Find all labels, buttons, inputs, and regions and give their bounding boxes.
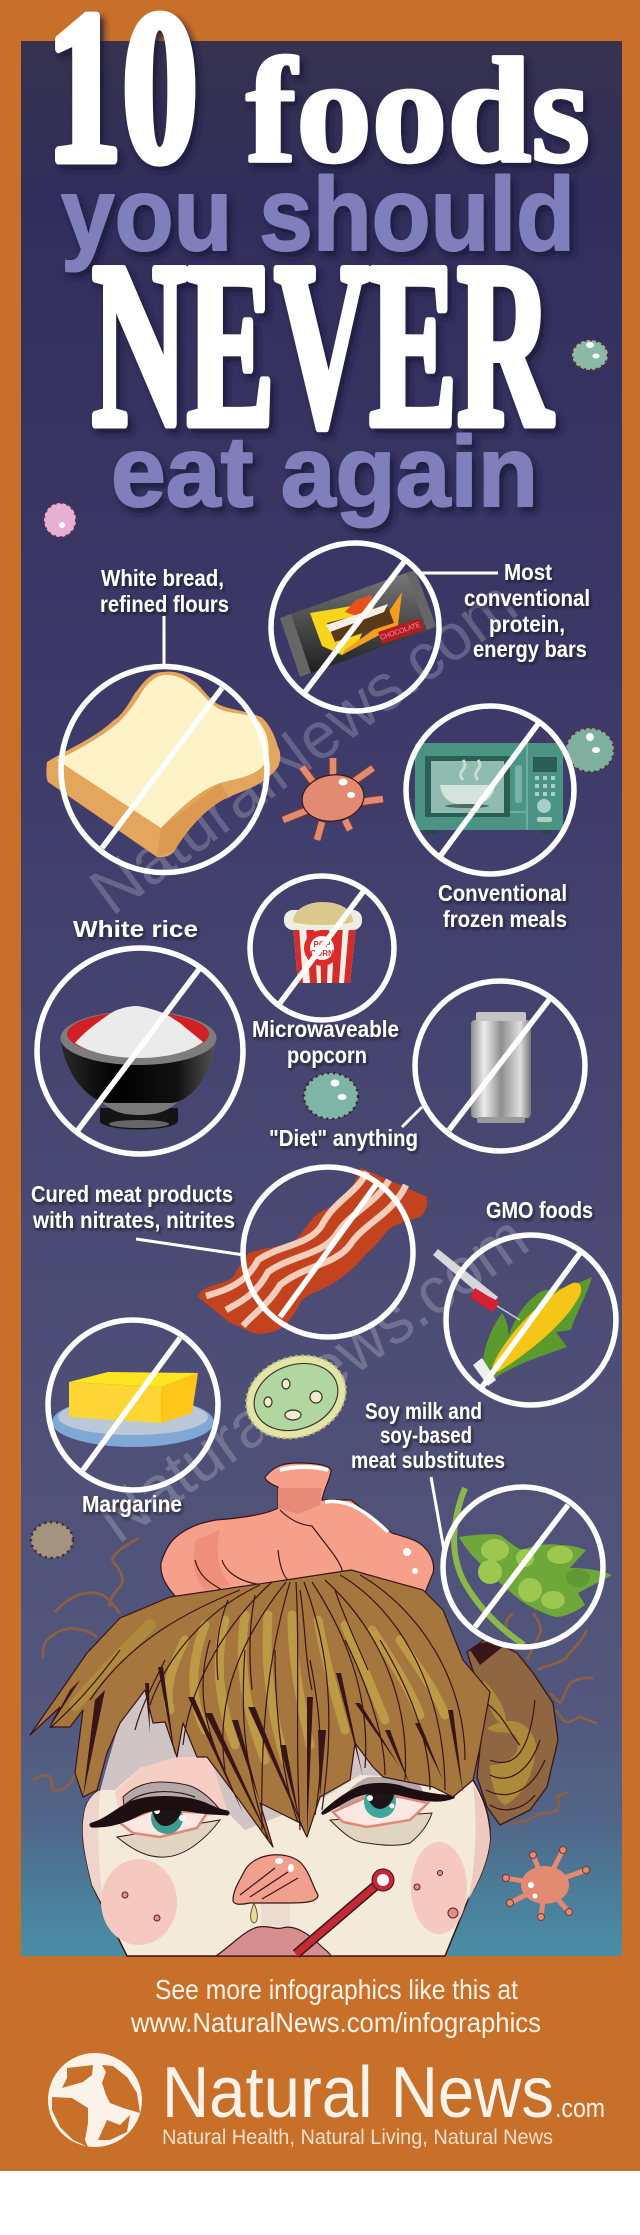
item: diet soda bbox=[269, 981, 585, 1151]
icon: teal germ beside microwave bbox=[566, 728, 614, 772]
stray curly hairs bbox=[33, 1538, 597, 1824]
label: cured meat bbox=[31, 1181, 235, 1233]
prohibition sign: margarine bbox=[48, 1320, 218, 1490]
icon: teal germ upper right bbox=[572, 340, 608, 370]
footer call to action: See more infographics like this at bbox=[155, 1974, 518, 2005]
icon: teal germ under popcorn bbox=[304, 1073, 358, 1119]
hair strands bbox=[50, 1575, 465, 1840]
label: diet anything: "Diet" anything bbox=[269, 1125, 418, 1151]
title line: foods: foods bbox=[246, 28, 590, 194]
connector: protein bars bbox=[422, 572, 498, 574]
icon: energy bar bbox=[280, 570, 436, 677]
connector: diet anything bbox=[402, 1107, 422, 1127]
item: frozen meals bbox=[406, 706, 614, 932]
label: margarine: Margarine bbox=[82, 1491, 182, 1517]
connector: soy bbox=[431, 1477, 444, 1550]
title bbox=[46, 0, 590, 528]
eye: left bbox=[92, 1782, 227, 1857]
item: margarine bbox=[48, 1320, 218, 1517]
icon: popcorn bucket: CORN bbox=[310, 949, 334, 958]
label: soy: meat substitutes bbox=[351, 1447, 505, 1473]
icon: corn and syringe bbox=[433, 1249, 592, 1386]
watermark: upper: NaturalNews.com bbox=[76, 565, 530, 928]
prohibition sign: bar bbox=[271, 543, 439, 711]
hair fringe dark tips bbox=[50, 1667, 463, 1847]
label: protein bars: Most bbox=[504, 559, 552, 585]
side of face, right bbox=[468, 1785, 490, 1900]
watermark: lower: NaturalNews.com bbox=[83, 1199, 541, 1556]
icon: popcorn bucket: POP bbox=[314, 940, 331, 949]
label: protein bars: conventional bbox=[464, 585, 590, 611]
prohibition sign: can bbox=[415, 981, 585, 1151]
item: white rice bbox=[37, 916, 243, 1154]
ice bag bbox=[161, 1463, 434, 1597]
label: popcorn: popcorn bbox=[287, 1042, 367, 1068]
cheek: right bbox=[411, 1842, 467, 1934]
icon: orange germ lower right bbox=[502, 1846, 590, 1920]
eye: right bbox=[323, 1777, 453, 1845]
icon: bacon bbox=[198, 1168, 427, 1334]
label: soy: Soy milk and bbox=[365, 1398, 482, 1424]
label: protein bars: protein, bbox=[489, 611, 565, 637]
illustration: sick woman bbox=[30, 1463, 597, 1956]
logo .com: .com bbox=[555, 2093, 605, 2123]
icon: rice bowl bbox=[60, 1006, 216, 1130]
icon: microwave bbox=[415, 743, 563, 834]
thermometer bbox=[296, 1869, 394, 1954]
cheek: left bbox=[101, 1859, 177, 1945]
hair bun bbox=[467, 1638, 558, 1825]
label: gmo foods: GMO foods bbox=[486, 1197, 593, 1223]
item: protein bars bbox=[271, 543, 590, 711]
label: white bread: refined flours bbox=[100, 591, 229, 617]
icon: soybean pods bbox=[454, 1488, 612, 1645]
connector: cured meat bbox=[136, 1239, 244, 1255]
label: white bread bbox=[100, 565, 229, 617]
label: protein bars bbox=[464, 559, 590, 662]
label: popcorn bbox=[252, 1016, 399, 1068]
label: frozen meals: Conventional bbox=[438, 880, 567, 906]
prohibition sign: rice bbox=[37, 948, 243, 1154]
prohibition sign: bacon bbox=[243, 1167, 413, 1337]
icon: soda can bbox=[471, 1012, 531, 1123]
item: white bread bbox=[46, 565, 280, 872]
label: protein bars: energy bars bbox=[473, 636, 587, 662]
label: popcorn: Microwaveable bbox=[252, 1016, 399, 1042]
prohibition sign: corn bbox=[446, 1235, 616, 1405]
pimples bbox=[122, 1870, 458, 1921]
icon: green cell bbox=[234, 1342, 358, 1452]
label: soy bbox=[351, 1398, 505, 1473]
face bbox=[83, 1700, 490, 1956]
logo: globe bbox=[48, 2053, 142, 2147]
logo tagline: Natural Health, Natural Living, Natural News bbox=[162, 2126, 553, 2149]
label: cured meat: with nitrates, nitrites bbox=[32, 1207, 235, 1233]
forehead shade bbox=[100, 1680, 470, 1830]
icon: energy bar: CHOCOLATE bbox=[379, 621, 422, 642]
icon: orange germ center bbox=[283, 758, 383, 840]
prohibition sign: soy bbox=[443, 1487, 603, 1647]
footer bbox=[48, 1974, 605, 2149]
side of face, left bbox=[83, 1790, 105, 1910]
prohibition sign: microwave bbox=[406, 706, 574, 874]
title line: eat again: eat again bbox=[111, 416, 538, 528]
icon: bread slice bbox=[46, 672, 280, 857]
label: cured meat: Cured meat products bbox=[31, 1181, 233, 1207]
title line: you should: you should bbox=[61, 157, 575, 273]
footer call to action bbox=[130, 1974, 541, 2038]
label: white bread: White bread, bbox=[101, 565, 224, 591]
label: soy: soy-based bbox=[380, 1422, 472, 1448]
hair fringe bbox=[30, 1570, 490, 1847]
logo wordmark: Natural News bbox=[162, 2053, 554, 2133]
lips bbox=[216, 1927, 331, 1956]
label: frozen meals: frozen meals bbox=[443, 906, 567, 932]
icon: popcorn bucket bbox=[284, 902, 362, 983]
item: cured meat bbox=[31, 1167, 427, 1337]
footer call to action: www.NaturalNews.com/infographics bbox=[130, 2007, 541, 2038]
prohibition sign: popcorn bbox=[250, 876, 394, 1020]
label: frozen meals bbox=[438, 880, 567, 932]
nose bbox=[233, 1855, 318, 1926]
prohibition sign: bread bbox=[61, 666, 267, 872]
icon: brown germ left bbox=[31, 1522, 73, 1558]
label: white rice: White rice bbox=[73, 916, 198, 942]
icon: pink germ bbox=[44, 503, 76, 537]
item: soy bbox=[351, 1398, 612, 1647]
item: popcorn bbox=[250, 876, 399, 1068]
icon: margarine on plate bbox=[52, 1372, 214, 1447]
item: gmo foods bbox=[433, 1197, 616, 1405]
connector: white bread bbox=[162, 616, 166, 667]
eye patch pink bbox=[115, 1757, 228, 1818]
